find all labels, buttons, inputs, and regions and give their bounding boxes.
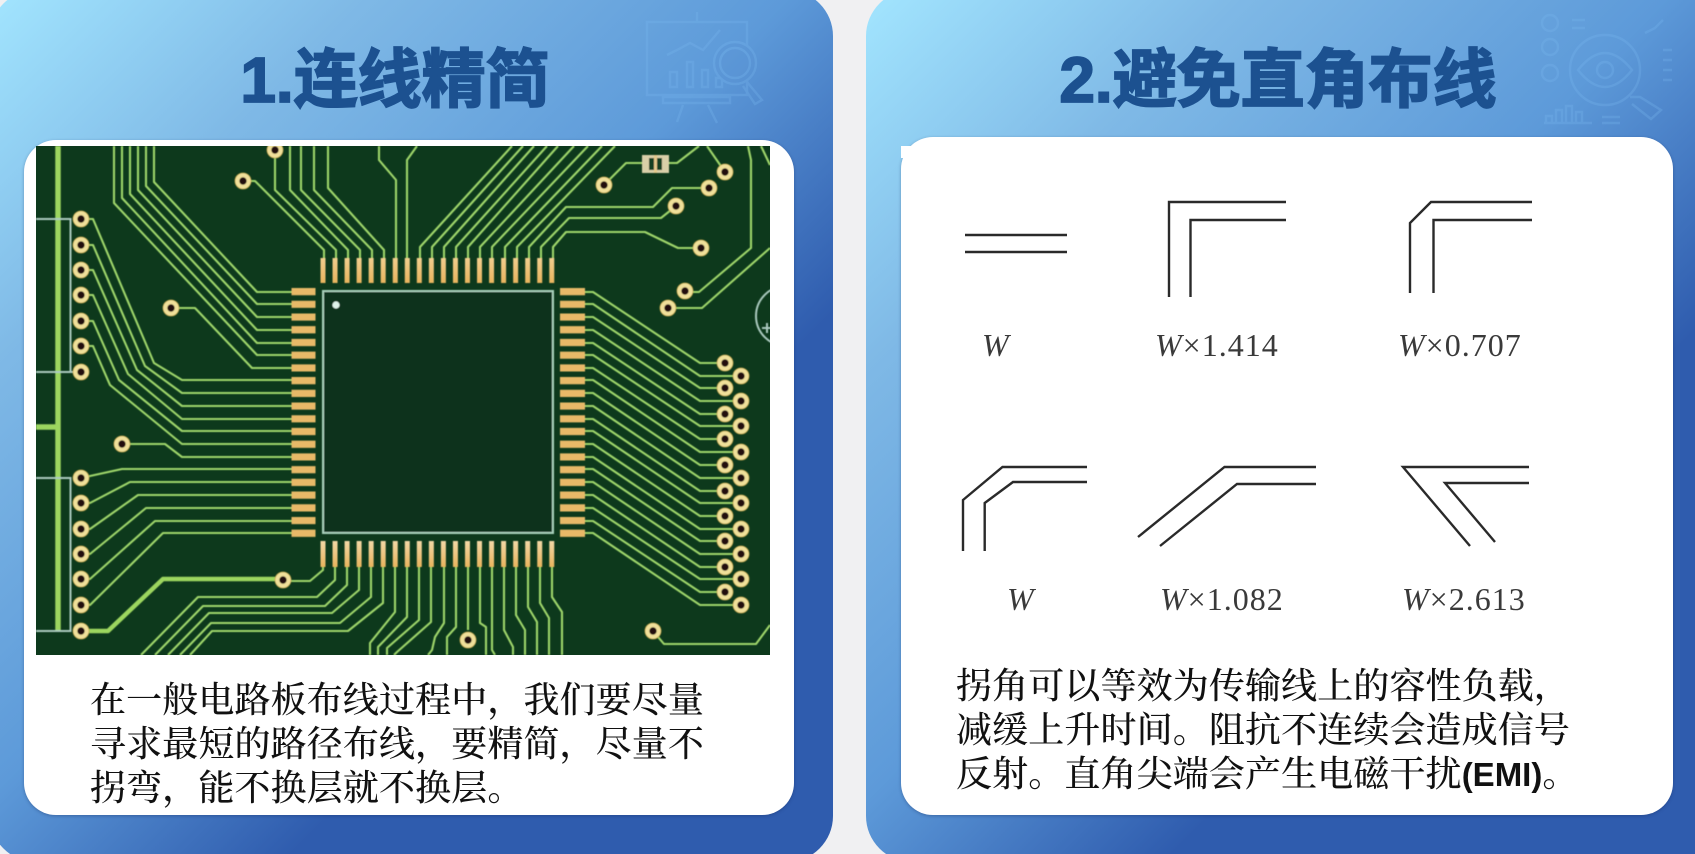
text block: corner effects description [956,666,1578,794]
diagram: chamfered outer corner [1410,202,1532,293]
diagram: acute corner [1403,467,1529,546]
PCB layout image [36,146,770,655]
label: W×1.414: W×1.414 [1155,327,1279,363]
label: W lower: W [1007,581,1037,617]
text block: routing description: 寻求最短的路径布线，要精简，尽量不 [90,724,704,764]
through-hole centres [77,146,745,644]
title: 1.连线精简: 1.连线精简 [240,44,550,116]
label: W: W [982,327,1012,363]
thick power traces [36,146,283,631]
label: W×1.082: W×1.082 [1160,581,1284,617]
quad flat package pads [304,270,572,554]
chip outline [323,291,553,533]
capacitor [642,155,669,173]
text block: routing description [90,680,704,808]
panel: 连线精简 [0,0,833,854]
card: right white panel [901,137,1673,815]
diagram: fully chamfered corner [963,467,1087,551]
label: W×0.707: W×0.707 [1398,327,1522,363]
diagram: obtuse corner [1138,467,1316,546]
title: 2.避免直角布线: 2.避免直角布线 [1059,44,1497,116]
text block: routing description: 在一般电路板布线过程中，我们要尽量 [90,680,704,720]
diagram: right-angle corner [1169,202,1286,297]
text block: routing description: 拐弯，能不换层就不换层。 [90,768,523,808]
text block: corner effects description: 反射。直角尖端会产生电磁干扰(EMI)。 [956,754,1578,794]
card: left white panel [24,140,794,815]
text block: corner effects description: 减缓上升时间。阻抗不连续会造成信号 [956,710,1570,750]
through-hole rings [73,142,749,648]
text block: corner effects description: 拐角可以等效为传输线上的容性负载， [956,666,1570,706]
diagram: straight trace [965,235,1067,252]
label: W×2.613: W×2.613 [1402,581,1526,617]
board outline marks [36,219,816,631]
panel: 避免直角布线 [866,0,1695,854]
